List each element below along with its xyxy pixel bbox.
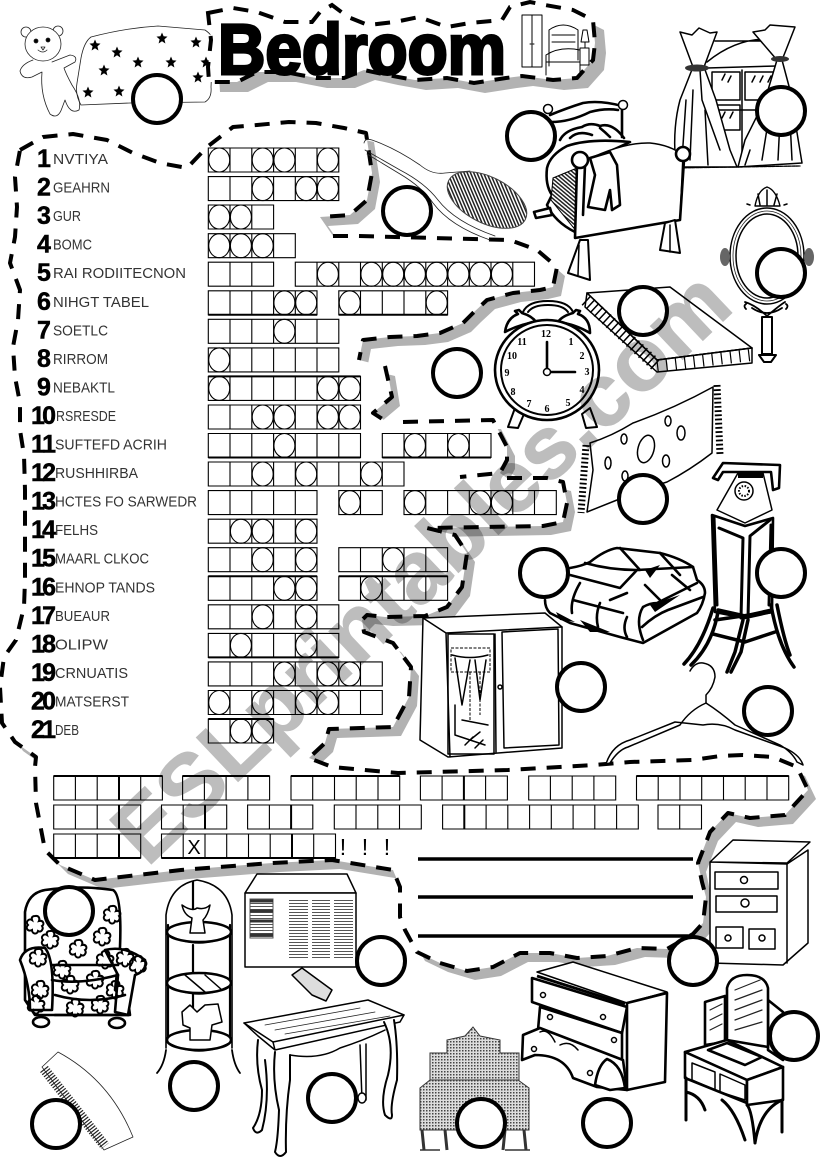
illustration: chest of three drawers — [710, 840, 810, 965]
illustration: wardrobe — [420, 613, 562, 757]
puzzle row 2: 2 — [37, 174, 51, 202]
puzzle row 5: RAI RODIITECNON — [53, 265, 186, 282]
puzzle row 16: EHNOP TANDS — [55, 579, 155, 596]
illustration: alarm clock: 3 — [584, 367, 590, 378]
illustration: mattress — [585, 287, 752, 372]
illustration: alarm clock: 2 — [580, 351, 584, 362]
puzzle row 17 — [31, 602, 339, 630]
secret message grid: ! — [384, 834, 390, 860]
puzzle row 8: 8 — [37, 345, 51, 373]
puzzle row 3: GUR — [53, 208, 81, 225]
puzzle row 12: RUSHHIRBA — [55, 465, 138, 482]
illustration: hair brush — [364, 139, 536, 240]
answer circle: shelf — [170, 1062, 218, 1110]
teddy bear — [20, 26, 80, 116]
answer circle: rug — [619, 475, 667, 523]
title banner — [208, 2, 595, 83]
answer circle: dressing table — [770, 1012, 818, 1060]
puzzle row 2: GEAHRN — [53, 180, 110, 197]
illustration: corner shelf — [157, 880, 240, 1073]
puzzle row 4: 4 — [37, 231, 51, 259]
puzzle row 18 — [31, 630, 339, 658]
answer circle: comb — [32, 1100, 80, 1148]
answer circle: table — [308, 1074, 356, 1122]
puzzle row 13: HCTES FO SARWEDR — [55, 494, 197, 511]
answer circle: wardrobe — [557, 663, 605, 711]
illustration: rug — [581, 385, 720, 513]
secret message grid — [54, 776, 789, 860]
illustration: alarm clock: 7 — [526, 399, 532, 410]
answer circle: pillow — [133, 75, 181, 123]
puzzle row 19: 19 — [31, 659, 56, 687]
illustration: alarm clock: 11 — [517, 337, 527, 348]
puzzle row 20: 20 — [31, 688, 56, 716]
illustration: alarm clock: 6 — [544, 404, 550, 415]
answer circle: drawers — [583, 1099, 631, 1147]
icon: small wardrobe and bed — [522, 15, 589, 75]
puzzle row 13 — [31, 488, 556, 516]
puzzle row 11: SUFTEFD ACRIH — [55, 436, 167, 454]
puzzle row 17: 17 — [31, 602, 56, 630]
illustration: bed — [534, 100, 690, 280]
puzzle row 21 — [31, 716, 274, 744]
illustration: comb — [42, 1052, 133, 1150]
puzzle row 6: NIHGT TABEL — [53, 294, 149, 311]
puzzle row 14: FELHS — [55, 522, 98, 539]
illustration: armchair — [20, 888, 146, 1028]
illustration: oval mirror — [720, 187, 814, 362]
illustration: telephone on stand — [684, 463, 794, 672]
puzzle row 14: 14 — [31, 516, 56, 544]
puzzle row 7: SOETLC — [53, 322, 108, 339]
puzzle row 4: BOMC — [53, 237, 92, 254]
illustration: alarm clock: 9 — [504, 368, 510, 379]
puzzle row 18: 18 — [31, 630, 56, 658]
puzzle row 8 — [37, 345, 339, 373]
puzzle row 16: 16 — [31, 573, 56, 601]
worksheet panel shadow — [8, 131, 816, 980]
dashed panel outline — [0, 122, 808, 971]
answer circle: curtains — [757, 87, 805, 135]
title banner shadow — [219, 12, 606, 93]
puzzle row 1: 1 — [37, 145, 51, 173]
illustration: open chest of drawers — [522, 962, 667, 1090]
puzzle row 9: NEBAKTL — [53, 379, 115, 396]
puzzle row 2 — [37, 174, 339, 202]
illustration: ornate desk — [420, 1027, 530, 1150]
answer circle: mattress — [619, 287, 667, 335]
illustration: alarm clock: 5 — [566, 398, 570, 409]
answer circle: bed — [507, 112, 555, 160]
illustration: alarm clock: 8 — [510, 387, 516, 398]
puzzle row 7: 7 — [37, 316, 51, 344]
puzzle row 1: NVTIYA — [53, 151, 108, 168]
puzzle row 6 — [37, 288, 448, 316]
puzzle row 7 — [37, 316, 339, 344]
secret message grid: X — [187, 837, 201, 859]
puzzle row 12: 12 — [31, 459, 56, 487]
puzzle row 11: 11 — [31, 430, 56, 458]
puzzle row 18: OLIPW — [55, 636, 109, 653]
answer circle: mirror — [757, 249, 805, 297]
secret message grid: ! — [340, 834, 346, 860]
puzzle row 10: 10 — [31, 402, 56, 430]
puzzle row 10 — [31, 402, 360, 430]
illustration: remote control — [292, 968, 332, 1001]
puzzle row 1 — [37, 145, 339, 173]
illustration: dressing table — [685, 975, 783, 1143]
puzzle row 15: 15 — [31, 545, 56, 573]
puzzle row 10: RSRESDE — [56, 408, 116, 425]
puzzle row 9 — [37, 373, 360, 401]
puzzle row 9: 9 — [37, 373, 51, 401]
answer circle: desk — [457, 1099, 505, 1147]
puzzle row 16 — [31, 573, 448, 601]
puzzle row 19 — [31, 659, 382, 687]
answer circle: hanger — [744, 687, 792, 735]
puzzle row 15: MAARL CLKOC — [55, 551, 149, 568]
puzzle row 4 — [37, 231, 295, 259]
puzzle row 5: 5 — [37, 259, 51, 287]
puzzle row 21: 21 — [31, 716, 56, 744]
puzzle row 17: BUEAUR — [55, 608, 110, 625]
puzzle row 15 — [31, 545, 448, 573]
illustration: quilt — [545, 548, 705, 643]
puzzle row 14 — [31, 516, 317, 544]
illustration: alarm clock — [495, 301, 599, 428]
pillow with stars — [76, 26, 213, 105]
puzzle row 19: CRNUATIS — [55, 665, 128, 682]
answer lines — [418, 859, 693, 936]
puzzle row 20 — [31, 688, 382, 716]
illustration: alarm clock: 1 — [568, 337, 574, 348]
illustration: air conditioner — [245, 874, 356, 967]
illustration: curtains and window — [672, 25, 802, 168]
puzzle row 3: 3 — [37, 202, 51, 230]
puzzle row 11 — [31, 430, 491, 458]
illustration: alarm clock: 12 — [541, 329, 551, 340]
answer circle: quilt — [520, 549, 568, 597]
puzzle row 8: RIRROM — [53, 351, 108, 368]
illustration: clothes hanger — [606, 663, 803, 765]
watermark: ESLprintables.com — [92, 251, 749, 882]
answer circle: armchair — [45, 887, 93, 935]
puzzle row 3 — [37, 202, 274, 230]
puzzle row 12 — [31, 459, 404, 487]
illustration: side table — [244, 1000, 404, 1156]
answer circle: telephone stand — [757, 549, 805, 597]
puzzle row 5 — [37, 259, 534, 287]
worksheet panel — [0, 122, 808, 971]
title: Bedroom — [218, 11, 506, 90]
secret message grid: ! — [362, 834, 368, 860]
illustration: alarm clock: 10 — [507, 351, 517, 362]
puzzle row 13: 13 — [31, 488, 56, 516]
answer circle: brush — [383, 187, 431, 235]
puzzle row 6: 6 — [37, 288, 51, 316]
puzzle row 21: DEB — [55, 722, 79, 739]
answer circle: chest — [669, 937, 717, 985]
puzzle row 20: MATSERST — [55, 694, 129, 710]
illustration: alarm clock: 4 — [580, 385, 584, 396]
answer circle: air conditioner — [357, 937, 405, 985]
answer circle: clock — [433, 349, 481, 397]
